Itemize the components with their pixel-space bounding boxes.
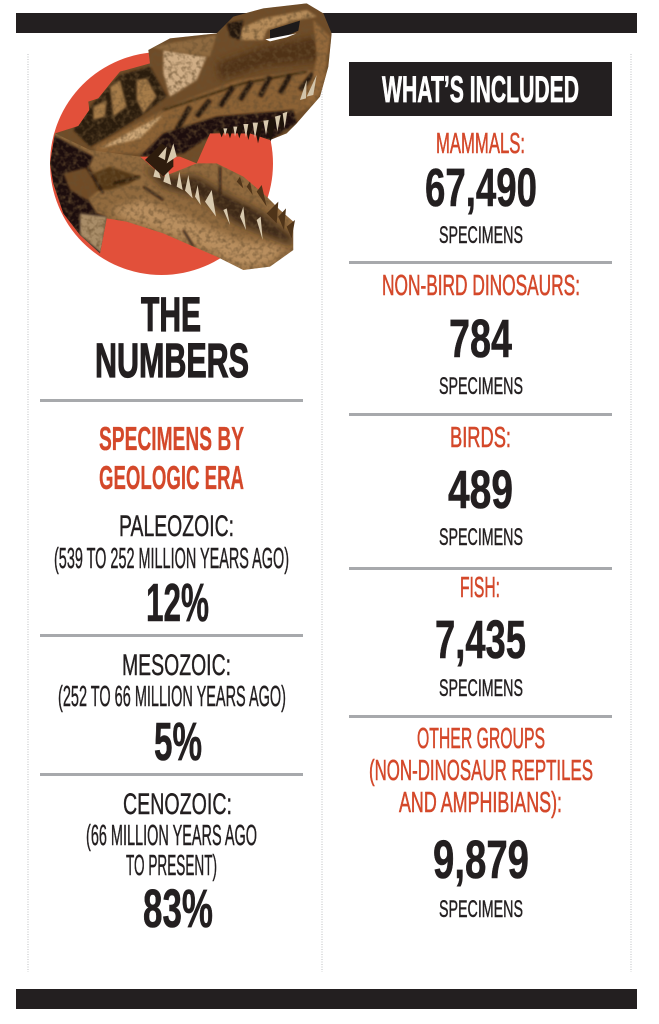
lower teeth xyxy=(153,163,263,240)
text block: cenozoic: CENOZOIC: xyxy=(123,788,232,821)
upper teeth xyxy=(218,112,287,143)
icon: red circle behind dinosaur xyxy=(50,52,273,275)
stat: other groups: AND AMPHIBIANS): xyxy=(399,787,562,819)
heading: specimens by geologic era xyxy=(99,420,244,496)
text block: cenozoic: TO PRESENT) xyxy=(126,850,217,882)
panel: what's included xyxy=(349,62,612,923)
text block: mesozoic xyxy=(58,649,286,772)
stat: non-bird dinosaurs xyxy=(382,270,580,400)
text block: paleozoic xyxy=(54,510,289,633)
stat: fish: FISH: xyxy=(460,572,500,604)
stat: other groups: SPECIMENS xyxy=(439,896,523,923)
stat: birds: SPECIMENS xyxy=(439,524,523,551)
stat: other groups: 9,879 xyxy=(433,830,529,890)
stat: mammals xyxy=(425,128,537,249)
bottom bar xyxy=(16,989,637,1009)
icon: dinosaur skull xyxy=(47,0,340,273)
stat: fish: SPECIMENS xyxy=(439,675,523,702)
panel: the numbers: (66 MILLION YEARS AGO xyxy=(86,820,257,852)
stat: birds: 489 xyxy=(448,460,513,520)
title: THE xyxy=(141,289,201,342)
heading: specimens by geologic era: SPECIMENS BY xyxy=(99,420,244,457)
stat: birds: BIRDS: xyxy=(450,422,511,454)
stat: other groups xyxy=(369,723,593,923)
text block: mesozoic: MESOZOIC: xyxy=(122,649,231,682)
stat: fish: 7,435 xyxy=(435,610,526,670)
top bar xyxy=(16,13,637,33)
stat: mammals: SPECIMENS xyxy=(439,222,523,249)
heading: what's included xyxy=(349,62,612,116)
title xyxy=(95,289,249,388)
stat: other groups: OTHER GROUPS xyxy=(417,723,545,755)
text block: cenozoic xyxy=(86,788,257,939)
panel: the numbers xyxy=(40,289,303,939)
heading: specimens by geologic era: GEOLOGIC ERA xyxy=(99,459,244,496)
upper skull xyxy=(47,0,340,167)
text block: paleozoic: PALEOZOIC: xyxy=(119,510,234,543)
stat: mammals: 67,490 xyxy=(425,158,537,218)
panel: the numbers: (252 TO 66 MILLION YEARS AGO) xyxy=(58,681,286,713)
text block: mesozoic: 5% xyxy=(154,712,202,772)
stat: non-bird dinosaurs: 784 xyxy=(449,309,512,369)
panel: the numbers: (539 TO 252 MILLION YEARS AGO) xyxy=(54,543,289,575)
text block: cenozoic: 83% xyxy=(143,879,213,939)
lower jaw xyxy=(47,130,300,273)
eye hole xyxy=(270,21,300,40)
stat: birds xyxy=(439,422,523,551)
title: NUMBERS xyxy=(95,335,249,388)
stat: mammals: MAMMALS: xyxy=(436,128,525,160)
text block: paleozoic: 12% xyxy=(146,573,209,633)
stat: non-bird dinosaurs: SPECIMENS xyxy=(439,373,523,400)
stat: fish xyxy=(435,572,526,702)
